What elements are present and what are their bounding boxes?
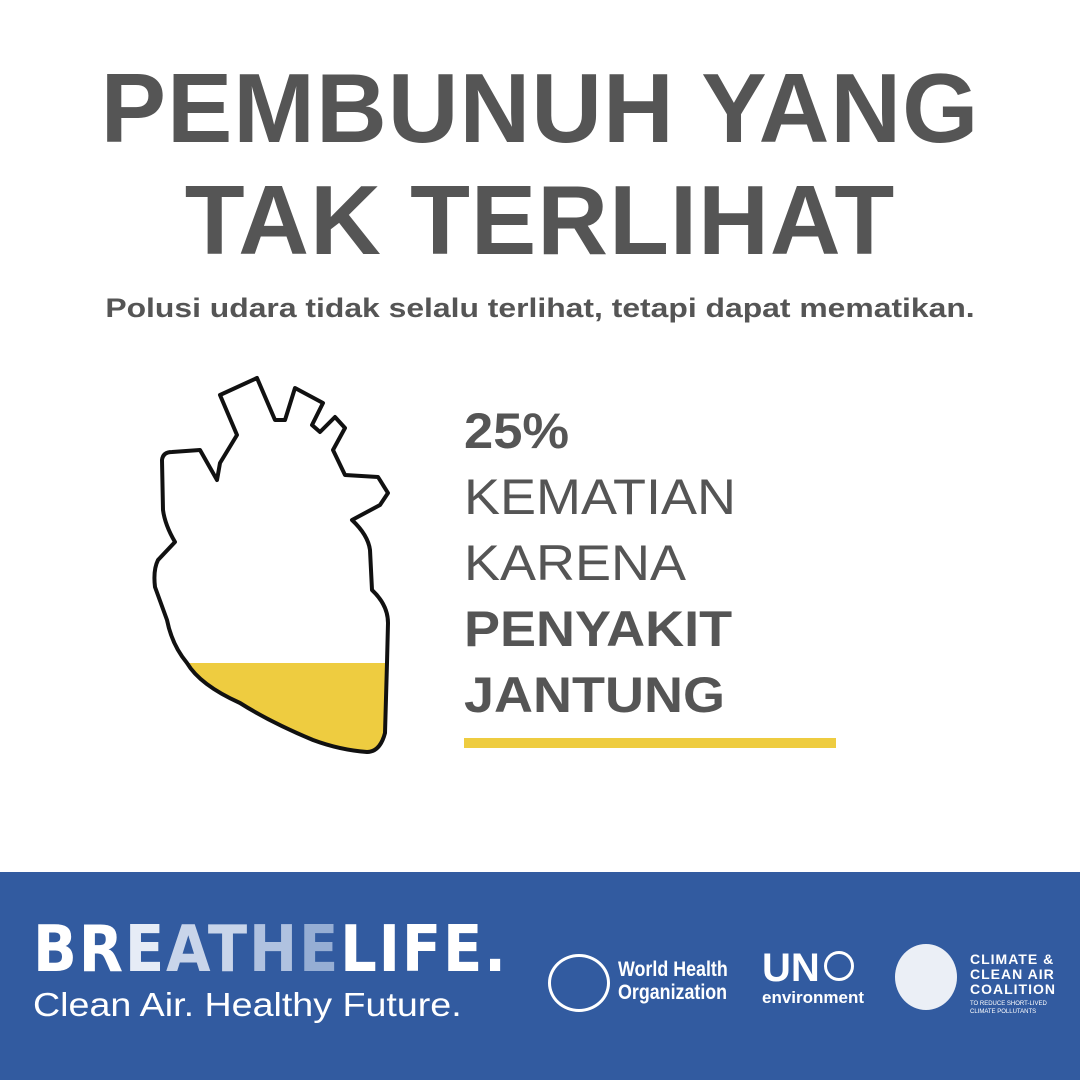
- stat text: PENYAKIT: [464, 601, 732, 657]
- CCAC logo: CLIMATE POLLUTANTS: [970, 1009, 1036, 1015]
- WHO logo: World Health: [618, 958, 728, 981]
- stat text: KARENA: [464, 535, 686, 591]
- CCAC logo: [895, 944, 1056, 1015]
- tagline: Clean Air. Healthy Future.: [33, 986, 462, 1023]
- CCAC logo: CLEAN AIR: [970, 966, 1055, 982]
- UN environment logo: [762, 946, 864, 1007]
- title: PEMBUNUH YANG: [101, 53, 979, 163]
- stat text: [464, 403, 736, 723]
- stat text: 25%: [464, 403, 569, 459]
- stat text: KEMATIAN: [464, 469, 736, 525]
- WHO logo: Organization: [618, 981, 727, 1004]
- UN environment logo: environment: [762, 988, 864, 1007]
- CCAC logo: TO REDUCE SHORT-LIVED: [970, 1001, 1047, 1007]
- underline bar: [464, 738, 836, 748]
- title: TAK TERLIHAT: [185, 165, 895, 275]
- title: [101, 53, 979, 275]
- icon: heart: [152, 376, 390, 754]
- subtitle: Polusi udara tidak selalu terlihat, tetapi dapat mematikan.: [105, 293, 975, 323]
- UN environment logo: UN: [762, 946, 820, 990]
- breathelife logo: BREATHELIFE.: [33, 913, 508, 987]
- WHO logo: [548, 954, 728, 1012]
- CCAC logo: CLIMATE &: [970, 951, 1054, 967]
- footer: [0, 872, 1080, 1080]
- stat text: JANTUNG: [464, 667, 725, 723]
- CCAC logo: COALITION: [970, 981, 1056, 997]
